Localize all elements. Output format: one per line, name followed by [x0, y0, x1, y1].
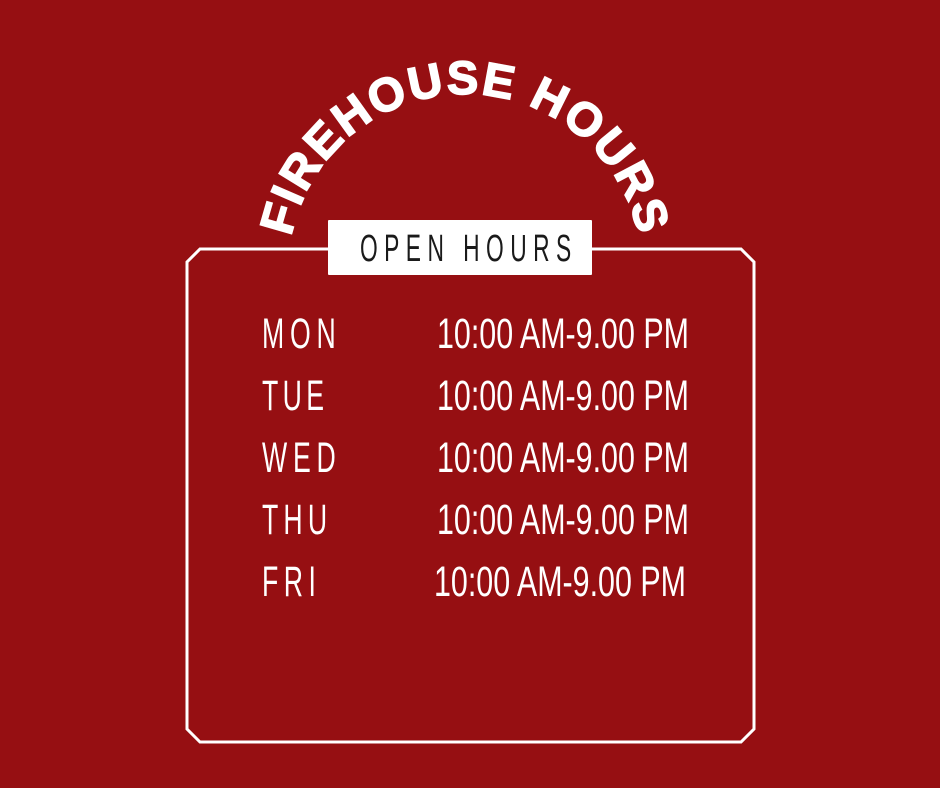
heading label: open hours [328, 220, 592, 275]
row: wednesday [262, 434, 689, 482]
schedule rows [262, 310, 689, 606]
row: tuesday: TUE [262, 372, 324, 420]
row: monday: MON [262, 310, 336, 358]
row: friday: FRI [262, 558, 316, 606]
row: thursday: THU [262, 496, 327, 544]
row: friday [262, 558, 686, 606]
row: wednesday: 10:00 AM-9.00 PM [437, 434, 689, 482]
row: thursday [262, 496, 689, 544]
row: tuesday [262, 372, 689, 420]
heading label: open hours: OPEN HOURS [360, 227, 571, 269]
row: thursday: 10:00 AM-9.00 PM [437, 496, 689, 544]
panel: hours frame [187, 249, 754, 742]
row: tuesday: 10:00 AM-9.00 PM [437, 372, 689, 420]
title: curved Firehouse Hours: FIREHOUSE HOURS [260, 60, 668, 235]
row: wednesday: WED [262, 434, 336, 482]
row: monday: 10:00 AM-9.00 PM [437, 310, 689, 358]
row: monday [262, 310, 689, 358]
row: friday: 10:00 AM-9.00 PM [434, 558, 686, 606]
